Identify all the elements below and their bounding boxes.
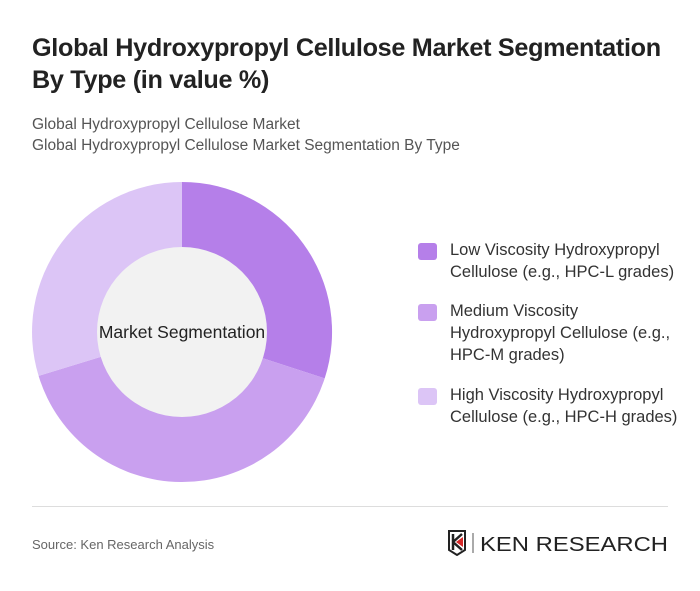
source: Source: Ken Research Analysis xyxy=(32,537,214,552)
legend xyxy=(418,241,677,426)
slice: high viscosity xyxy=(32,182,182,376)
center label xyxy=(97,247,267,417)
legend item: low: Low Viscosity Hydroxypropyl xyxy=(450,241,660,259)
legend item: medium: HPC-M grades) xyxy=(450,346,565,364)
subtitle: Global Hydroxypropyl Cellulose Market Segmentation By Type xyxy=(32,137,460,154)
slice: low viscosity xyxy=(182,182,332,378)
subtitle xyxy=(32,116,460,154)
donut chart xyxy=(32,182,332,482)
legend item: medium xyxy=(418,302,670,364)
center label: Market Segmentation xyxy=(99,322,265,342)
legend item: low xyxy=(418,241,674,281)
title: By Type (in value %) xyxy=(32,66,269,94)
slice: medium viscosity xyxy=(39,332,325,482)
legend item: high: Cellulose (e.g., HPC-H grades) xyxy=(450,408,677,426)
logo xyxy=(448,530,668,556)
title xyxy=(32,34,661,94)
title: Global Hydroxypropyl Cellulose Market Segmentation xyxy=(32,34,661,62)
subtitle: Global Hydroxypropyl Cellulose Market xyxy=(32,116,300,133)
legend item: medium: Hydroxypropyl Cellulose (e.g., xyxy=(450,324,670,342)
logo: KEN RESEARCH xyxy=(480,534,668,556)
legend item: medium: Medium Viscosity xyxy=(450,302,578,320)
legend item: high: High Viscosity Hydroxypropyl xyxy=(450,386,663,404)
legend item: high xyxy=(418,386,677,426)
legend item: low: Cellulose (e.g., HPC-L grades) xyxy=(450,263,674,281)
